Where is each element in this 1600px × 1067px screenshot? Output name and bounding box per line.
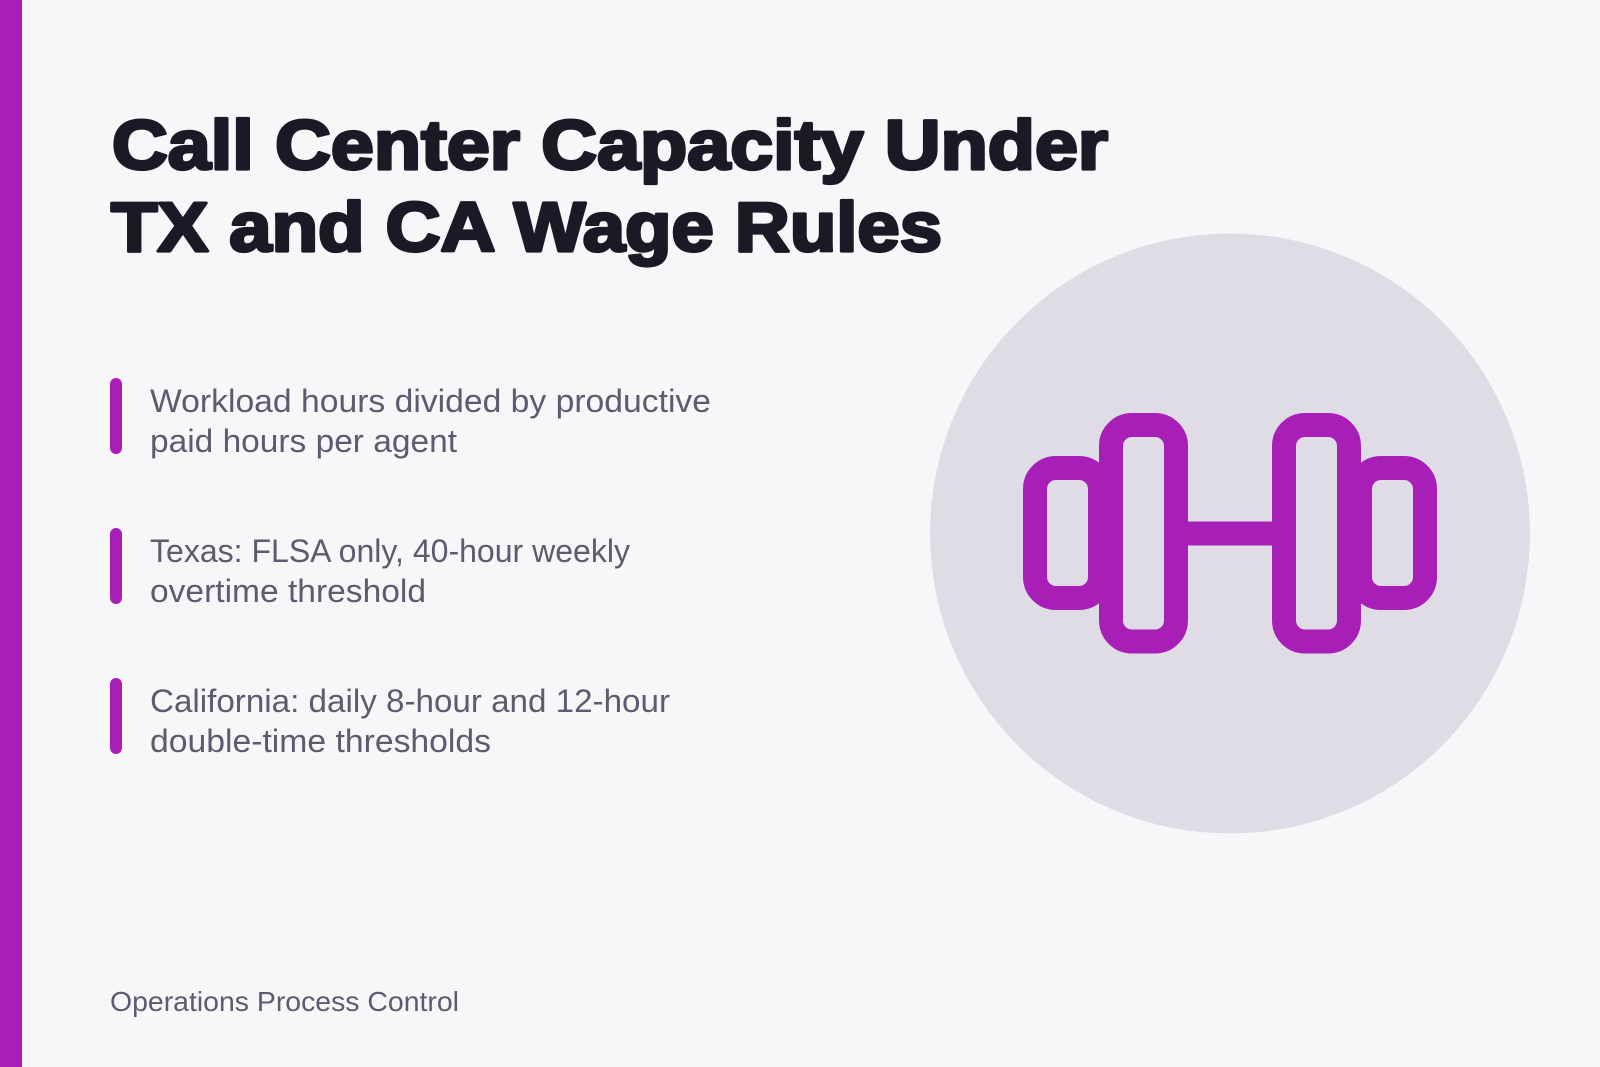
left accent stripe — [0, 0, 22, 1067]
title: Call Center Capacity Under — [112, 106, 1108, 184]
footer label: Operations Process Control — [110, 986, 459, 1017]
bullet: Texas rule — [110, 528, 630, 609]
bullet list — [110, 378, 711, 759]
bullet: California rule: double-time thresholds — [150, 723, 491, 759]
bullet: California rule — [110, 678, 670, 759]
bullet: Texas rule: overtime threshold — [150, 573, 426, 609]
icon: barbell — [1035, 425, 1425, 642]
bullet: workload formula: paid hours per agent — [150, 423, 457, 459]
bullet: California rule: California: daily 8-hour and 12-hour — [150, 683, 670, 719]
bullet: Texas rule: Texas: FLSA only, 40-hour weekly — [150, 533, 630, 569]
bullet: workload formula: Workload hours divided by productive — [150, 383, 711, 419]
title: TX and CA Wage Rules — [111, 188, 942, 266]
icon circle background — [930, 234, 1530, 834]
bullet: workload formula — [110, 378, 711, 459]
title — [111, 106, 1108, 266]
